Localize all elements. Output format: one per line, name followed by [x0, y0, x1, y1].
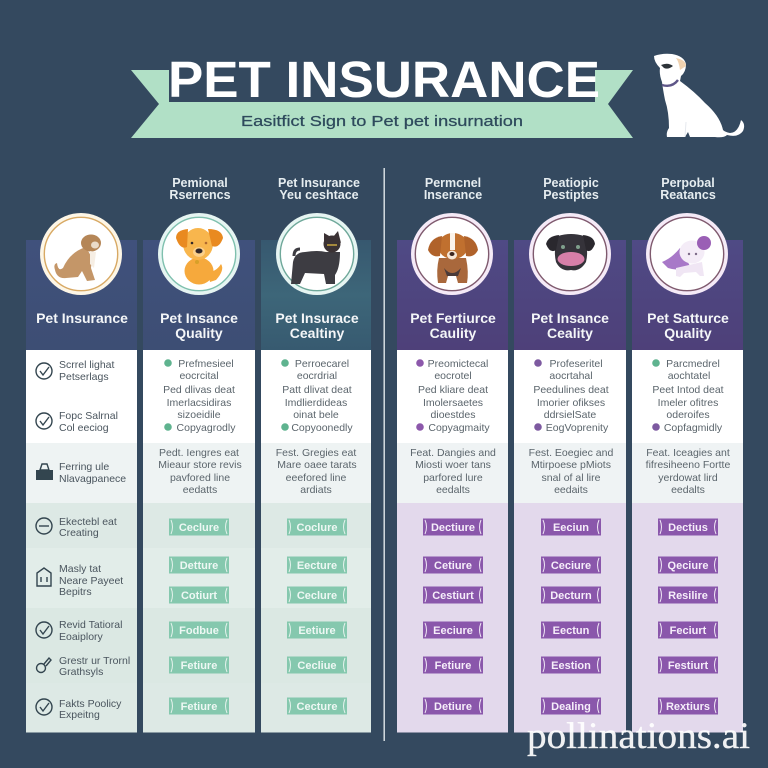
pet portrait: tan cat	[40, 213, 122, 295]
top label: Pestiptes	[543, 188, 599, 202]
feature ribbons: Festiurt	[668, 660, 709, 672]
heading: Quality	[664, 325, 712, 341]
feature list: Grathsyls	[59, 666, 103, 678]
heading: Pet Satturce	[647, 310, 729, 326]
feature list: Col eeciog	[59, 422, 109, 434]
description: Parcmedrel	[666, 358, 720, 370]
panel: column 1	[26, 213, 137, 732]
top label: Rserrencs	[169, 188, 231, 202]
panel: column 2	[143, 176, 255, 732]
description: Miosti woer tans	[415, 459, 491, 471]
feature ribbons	[287, 518, 347, 714]
feature ribbons: Qeciure	[668, 560, 708, 572]
top label: Reatancs	[660, 188, 716, 202]
description: parfored lure	[423, 472, 483, 484]
description: Pedt. Iengres eat	[159, 447, 239, 459]
description: sizoeidile	[177, 409, 221, 421]
panel: column 4	[397, 176, 508, 732]
description: eocrotel	[434, 370, 472, 382]
feature list: Fakts Poolicy	[59, 698, 122, 710]
heading: Quality	[175, 325, 223, 341]
feature ribbons: Fetiure	[181, 660, 217, 672]
feature list: Eoaiplory	[59, 631, 104, 643]
feature list: Revid Tatioral	[59, 619, 122, 631]
feature list: Masly tat	[59, 563, 101, 575]
feature ribbons: Resilire	[668, 590, 708, 602]
description: Copyagmaity	[428, 422, 490, 434]
feature list: Ferring ule	[59, 461, 109, 473]
description: Copyagrodly	[177, 422, 236, 434]
feature ribbons: Eeciun	[553, 522, 589, 534]
feature ribbons: Cecliue	[297, 660, 337, 672]
feature ribbons: Eeciure	[433, 625, 473, 637]
heading: Ceality	[547, 325, 593, 341]
pet portrait: orange puppy	[158, 213, 240, 295]
feature ribbons: Cotiurt	[181, 590, 217, 602]
pet portrait: black pug	[529, 213, 611, 295]
heading	[160, 310, 238, 341]
feature ribbons: Detture	[180, 560, 218, 572]
description: EogVoprenity	[546, 422, 609, 434]
description	[529, 358, 613, 496]
watermark: pollinations.ai	[527, 716, 750, 757]
feature ribbons: Feciurt	[670, 625, 707, 637]
heading: Pet Insurace	[275, 310, 359, 326]
description	[158, 358, 242, 496]
feature ribbons: Dealing	[551, 701, 591, 713]
description: Mieaur store revis	[158, 459, 242, 471]
feature ribbons: Fetiure	[181, 701, 217, 713]
feature list: Ekectebl eat	[59, 516, 117, 528]
top label	[543, 176, 599, 202]
feature list: Expeitng	[59, 709, 100, 721]
heading: Pet Insance	[160, 310, 238, 326]
description: eedatts	[183, 484, 217, 496]
top label: Perpobal	[661, 176, 715, 190]
heading: Cealtiny	[290, 325, 344, 341]
feature list: Scrrel lighat	[59, 359, 115, 371]
icon: shield check	[36, 622, 52, 638]
feature ribbons: Detiure	[434, 701, 472, 713]
description: eeefored line	[286, 472, 347, 484]
panel: column 3	[261, 176, 371, 732]
pet portrait: brown and white dog	[411, 213, 493, 295]
subtitle: Easitfict Sign to Pet pet insurnation	[241, 113, 523, 130]
pet portrait: white and purple puppy	[646, 213, 728, 295]
feature ribbons	[423, 518, 483, 714]
description: eocrcital	[179, 370, 219, 382]
description: Imdlierdideas	[285, 397, 347, 409]
description	[410, 358, 496, 496]
description: snal of al lire	[542, 472, 601, 484]
feature ribbons: Ceclure	[297, 590, 337, 602]
icon: white sitting dog	[654, 54, 744, 137]
description: Preomictecal	[428, 358, 488, 370]
description: aochtatel	[668, 370, 710, 382]
feature list: Bepitrs	[59, 586, 92, 598]
feature ribbons: Eecture	[297, 560, 337, 572]
feature ribbons: Cecture	[297, 701, 337, 713]
description: ddrsielSate	[544, 409, 596, 421]
icon: house	[37, 568, 51, 586]
description: ardiats	[300, 484, 332, 496]
description: Copyoonedly	[291, 422, 353, 434]
icon: check circle	[36, 699, 52, 715]
heading	[531, 310, 609, 341]
heading	[647, 310, 729, 341]
top label	[169, 176, 231, 202]
heading: Caulity	[430, 325, 477, 341]
feature ribbons: Eetiure	[298, 625, 336, 637]
feature ribbons	[541, 518, 601, 714]
description: Ped dlivas deat	[163, 384, 235, 396]
feature ribbons: Eestion	[551, 660, 591, 672]
description: dioestdes	[431, 409, 475, 421]
description: aocrtahal	[549, 370, 593, 382]
top label	[424, 176, 482, 202]
icon: link	[36, 658, 51, 672]
top label: Yeu ceshtace	[279, 188, 359, 202]
description	[646, 358, 730, 496]
feature ribbons: Coclure	[297, 522, 337, 534]
top label: Pet Insurance	[278, 176, 360, 190]
panel: column 6	[632, 176, 743, 732]
heading	[410, 310, 496, 341]
feature ribbons: Cestiurt	[432, 590, 474, 602]
description: Copfagmidly	[664, 422, 723, 434]
top label: Peatiopic	[543, 176, 599, 190]
feature ribbons	[658, 518, 718, 714]
description: eedalts	[671, 484, 705, 496]
description: eocrdrial	[297, 370, 337, 382]
feature ribbons: Dectius	[668, 522, 708, 534]
heading: Pet Fertiurce	[410, 310, 496, 326]
heading	[275, 310, 359, 341]
description: eedalts	[436, 484, 470, 496]
description: Imorier ofikses	[537, 397, 605, 409]
description: Feat. Dangies and	[410, 447, 496, 459]
description: Fest. Eoegiec and	[529, 447, 613, 459]
feature ribbons: Ceciure	[551, 560, 591, 572]
description: eedaits	[554, 484, 588, 496]
heading: Pet Insance	[531, 310, 609, 326]
feature ribbons: Cetiure	[434, 560, 472, 572]
description: Imolersaetes	[423, 397, 483, 409]
top label	[278, 176, 360, 202]
feature list	[36, 359, 130, 721]
description: Profeseritel	[549, 358, 603, 370]
feature ribbons: Eectun	[553, 625, 590, 637]
description: Peet Intod deat	[652, 384, 724, 396]
description	[276, 358, 357, 496]
vertical divider	[384, 168, 385, 741]
description: Feat. Iceagies ant	[646, 447, 730, 459]
top label: Permcnel	[425, 176, 481, 190]
feature ribbons: Fetiure	[435, 660, 471, 672]
icon: check circle	[36, 413, 52, 429]
description: Prefmesieel	[178, 358, 234, 370]
feature ribbons: Ceclure	[179, 522, 219, 534]
feature list: Petserlags	[59, 371, 109, 383]
icon: bag	[36, 464, 53, 480]
feature ribbons: Decturn	[550, 590, 592, 602]
icon: badge	[36, 518, 52, 534]
description: Mtirpoese pMiots	[531, 459, 611, 471]
top label: Pemional	[172, 176, 228, 190]
description: Mare oaee tarats	[277, 459, 357, 471]
description: Imeler ofitres	[658, 397, 718, 409]
description: Ped kliare deat	[418, 384, 488, 396]
description: fifresiheeno Fortte	[646, 459, 730, 471]
feature ribbons: Fodbue	[179, 625, 219, 637]
heading: Pet Insurance	[36, 310, 128, 326]
feature ribbons: Dectiure	[431, 522, 475, 534]
description: Perroecarel	[295, 358, 349, 370]
feature list: Neare Payeet	[59, 575, 123, 587]
pet portrait: black cat	[276, 213, 358, 295]
feature list: Fopc Salrnal	[59, 410, 118, 422]
top label	[660, 176, 716, 202]
feature ribbons: Rextiurs	[666, 701, 710, 713]
description: Imerlacsidiras	[167, 397, 231, 409]
description: yerdowat lird	[658, 472, 718, 484]
description: Peedulines deat	[533, 384, 609, 396]
feature list: Nlavagpanece	[59, 473, 126, 485]
panel: column 5	[514, 176, 626, 732]
title: PET INSURANCE	[168, 51, 600, 108]
top label: Inserance	[424, 188, 482, 202]
title banner	[131, 51, 633, 138]
description: oinat bele	[293, 409, 339, 421]
description: Patt dlivat deat	[282, 384, 352, 396]
icon: check circle	[36, 363, 52, 379]
description: Fest. Gregies eat	[276, 447, 356, 459]
feature ribbons	[169, 518, 229, 714]
description: pavfored line	[170, 472, 230, 484]
feature list: Creating	[59, 527, 99, 539]
feature list: Grestr ur Trornl	[59, 655, 130, 667]
description: oderoifes	[666, 409, 710, 421]
